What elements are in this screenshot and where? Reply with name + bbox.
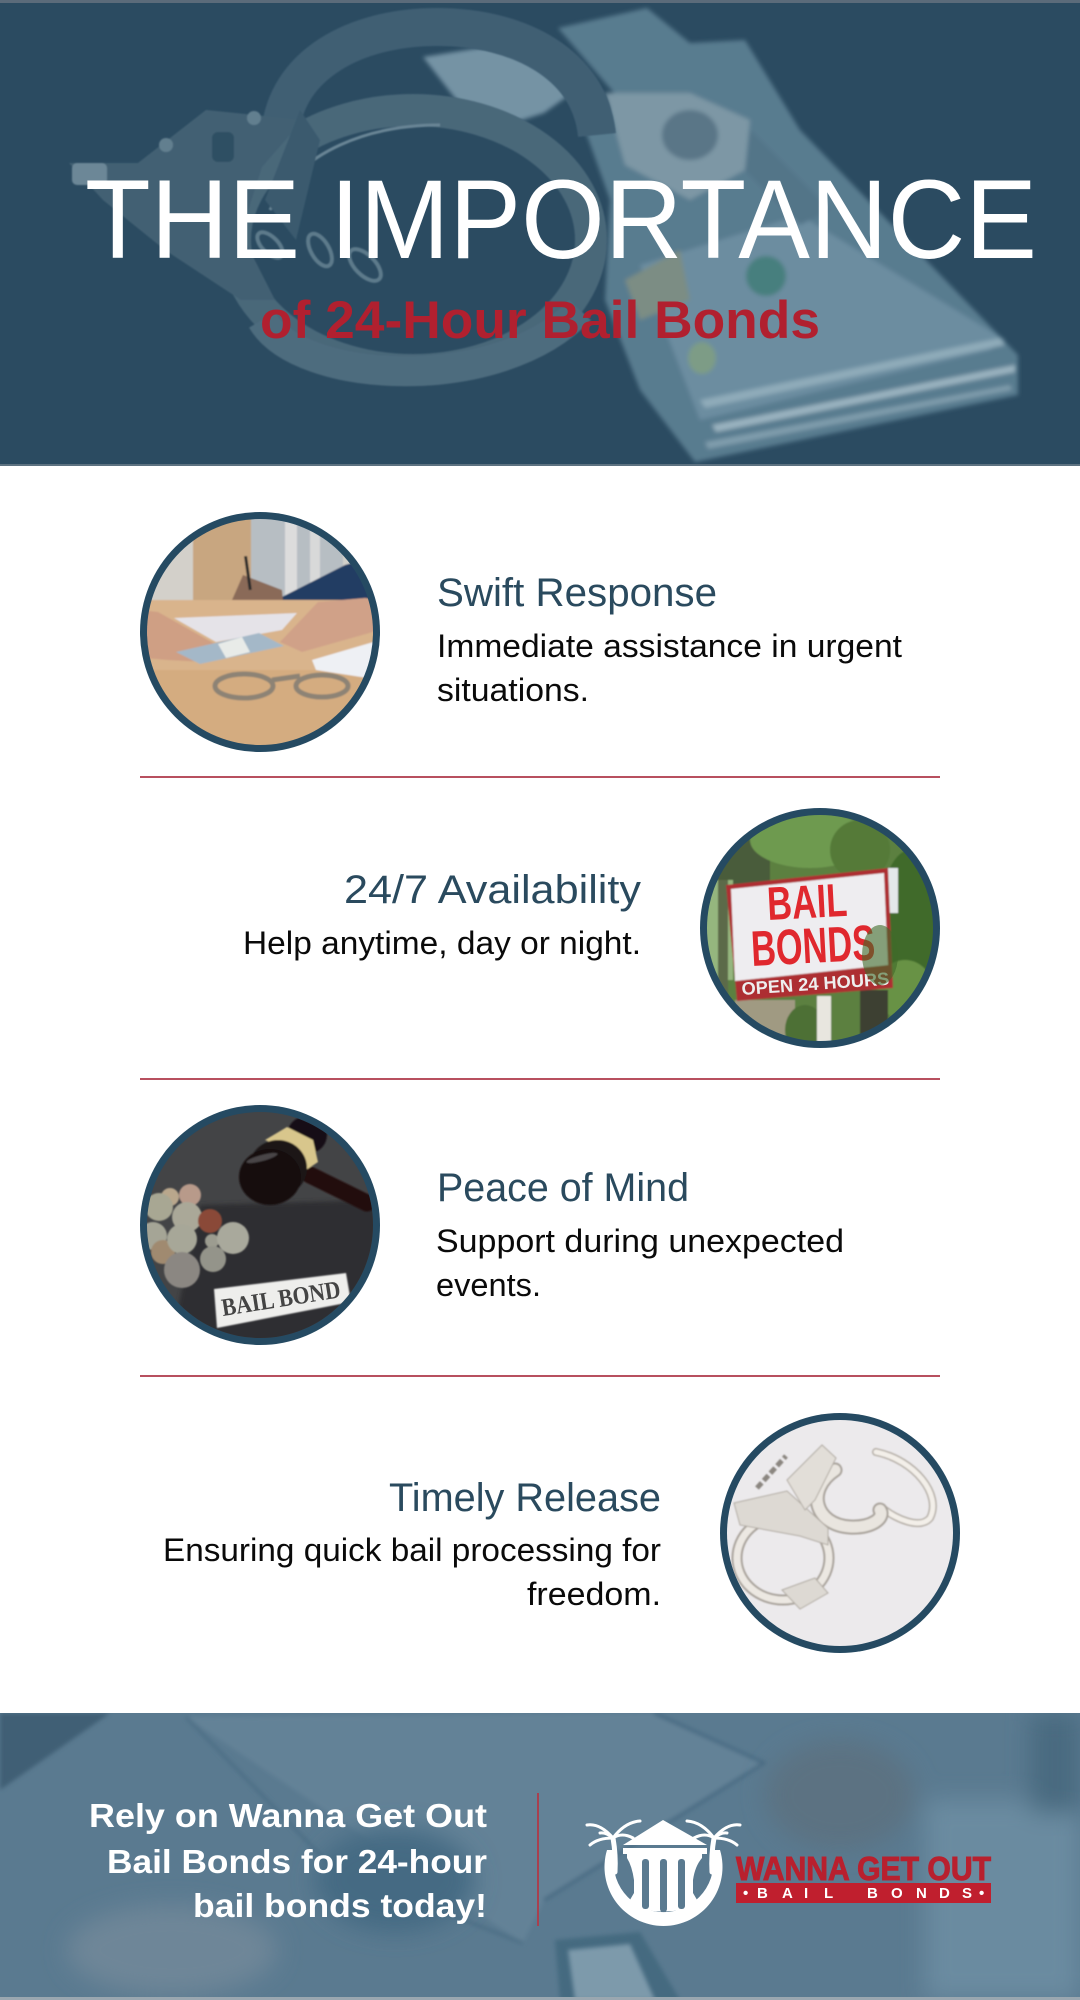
photo: signing bail paperwork: [140, 512, 380, 752]
heading: Peace of Mind: Peace of Mind: [437, 1166, 689, 1210]
body text: [163, 1532, 661, 1612]
panel: Swift Response: [140, 512, 902, 752]
panel: header banner with handcuffs and money photo: [0, 0, 1080, 466]
body text: situations.: [437, 672, 589, 708]
photo: gavel, coins and bail bond note: BAIL BOND: [220, 1276, 342, 1322]
heading: Timely Release: Timely Release: [389, 1476, 661, 1520]
body text: Support during unexpected: [436, 1223, 844, 1259]
logo: Wanna Get Out Bail Bonds: [587, 1820, 991, 1926]
photo: bail bonds sign: BAIL: [766, 873, 848, 930]
photo: bail bonds sign: BONDS: [750, 915, 876, 977]
photo: bail bonds sign: OPEN 24 HOURS: [741, 969, 890, 999]
subtitle: of 24-Hour Bail Bonds: [260, 291, 820, 350]
wordmark: WANNA GET OUT: [736, 1850, 991, 1887]
heading: 24/7 Availability: 24/7 Availability: [344, 868, 641, 912]
body text: Immediate assistance in urgent: [437, 628, 902, 664]
call to action text: Bail Bonds for 24-hour: [107, 1843, 487, 1880]
icon: courthouse emblem with palms: [587, 1820, 740, 1926]
call to action text: [89, 1797, 487, 1924]
photo: bail bonds sign: [700, 808, 942, 1055]
panel: 24/7 Availability: [243, 808, 942, 1055]
body text: [437, 628, 902, 708]
panel: footer call to action: [0, 1713, 1080, 2000]
body text: events.: [436, 1267, 541, 1303]
photo: open silver handcuffs: [720, 1413, 960, 1653]
call to action text: Rely on Wanna Get Out: [89, 1797, 487, 1834]
panel: Peace of Mind: [139, 1105, 844, 1345]
body text: [436, 1223, 844, 1303]
body text: Ensuring quick bail processing for: [163, 1532, 661, 1568]
red tagline bar: •BAILBONDS•: [743, 1885, 984, 1902]
panel: Timely Release: [163, 1413, 960, 1653]
body text: freedom.: [527, 1576, 661, 1612]
title: THE IMPORTANCE: [85, 157, 1037, 282]
photo: gavel, coins and bail bond note: [139, 1105, 380, 1345]
call to action text: bail bonds today!: [193, 1887, 487, 1924]
body text: Help anytime, day or night.: [243, 925, 641, 961]
heading: Swift Response: Swift Response: [437, 571, 717, 615]
